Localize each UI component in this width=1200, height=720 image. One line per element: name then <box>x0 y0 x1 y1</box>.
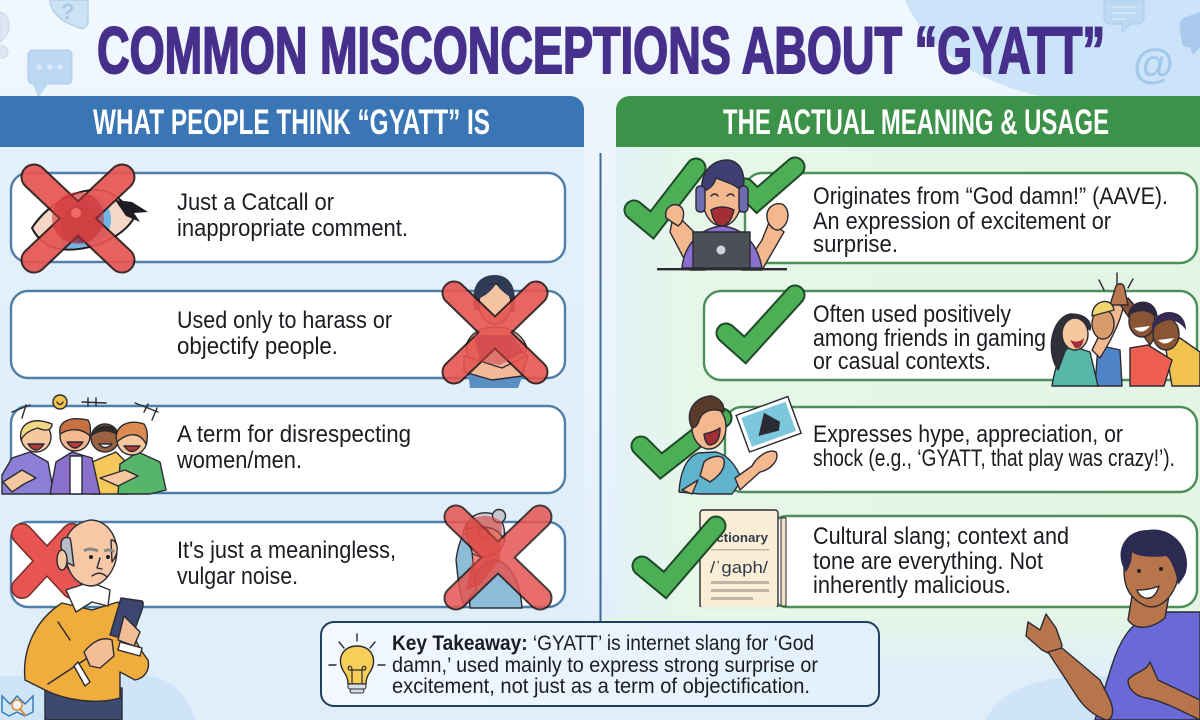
text: cultural slang: inherently malicious. <box>813 572 1011 599</box>
text: cultural slang <box>813 523 1069 599</box>
card: catcall <box>11 173 565 262</box>
panel heading: left: WHAT PEOPLE THINK “GYATT” IS <box>93 103 490 142</box>
text: disrespecting: women/men. <box>176 447 302 474</box>
panel heading bar: right <box>616 96 1200 147</box>
decorative social icons <box>0 0 1200 98</box>
text: origin <box>813 183 1168 258</box>
card: meaningless noise <box>11 522 565 607</box>
text: positive use <box>813 301 1046 375</box>
callout: key takeaway <box>321 622 879 706</box>
icon: light bulb <box>329 634 385 693</box>
text: harass <box>177 307 392 360</box>
illustration: dictionary page <box>698 510 786 610</box>
logo <box>2 696 33 716</box>
card: hype <box>725 407 1197 492</box>
icon: green check 1a <box>634 168 696 225</box>
illustration: speaking man <box>1026 529 1200 720</box>
text: positive use: Often used positively <box>813 301 1012 328</box>
card: origin <box>745 173 1197 263</box>
text: hype <box>813 421 1175 472</box>
takeaway text: excitement, not just as a term of objectification. <box>392 675 810 698</box>
text: disrespecting: A term for disrespecting <box>177 421 411 448</box>
takeaway text: damn,’ used mainly to express strong surprise or <box>392 654 818 677</box>
text: cultural slang: Cultural slang; context and <box>813 523 1069 550</box>
text: cultural slang: tone are everything. Not <box>813 548 1043 575</box>
illustration: laughing friends <box>2 395 166 494</box>
icon: red x left of old man <box>22 534 72 588</box>
text: origin: surprise. <box>813 231 898 258</box>
illustration: dictionary page: Dictionary <box>703 530 769 545</box>
text: catcall: inappropriate comment. <box>177 215 408 242</box>
icon: green check 2 <box>726 295 795 350</box>
icon: green check 1b <box>745 167 795 200</box>
text: positive use: or casual contexts. <box>813 348 991 375</box>
text: meaningless noise: vulgar noise. <box>177 563 298 590</box>
decorative social icons: @ <box>1133 40 1174 87</box>
takeaway text: Key Takeaway: ‘GYATT’ is internet slang for ‘God <box>392 632 814 655</box>
illustration: friends high five <box>1051 273 1200 386</box>
icon: crossed eye <box>32 177 148 260</box>
text: hype: Expresses hype, appreciation, or <box>813 421 1123 448</box>
text: positive use: among friends in gaming <box>813 325 1046 352</box>
card: positive use <box>704 291 1197 380</box>
text: harass: objectify people. <box>177 333 338 360</box>
text: disrespecting <box>176 421 411 474</box>
icon: crossed old woman <box>456 510 540 608</box>
card: harass <box>11 291 565 378</box>
text: catcall <box>177 189 408 242</box>
panel heading bar: left <box>0 96 584 147</box>
panel: what people think <box>0 96 584 617</box>
illustration: hyped person with game card <box>679 396 801 494</box>
illustration: dictionary page: /ˈgaph/ <box>710 558 768 577</box>
icon: green check 4 <box>642 526 716 585</box>
text: origin: An expression of excitement or <box>813 208 1111 235</box>
illustration: excited gamer with laptop <box>657 160 788 270</box>
text: meaningless noise <box>177 537 396 590</box>
panel: actual meaning <box>616 96 1200 617</box>
illustration: confused old man with phone <box>25 520 148 720</box>
icon: crossed woman with folded arms <box>454 275 536 388</box>
card: cultural slang <box>770 516 1197 607</box>
text: harass: Used only to harass or <box>177 307 392 334</box>
text: catcall: Just a Catcall or <box>177 189 334 216</box>
takeaway text <box>392 632 818 698</box>
text: meaningless noise: It's just a meaningless, <box>177 537 396 564</box>
icon: green check 3 <box>641 418 722 466</box>
card: disrespecting <box>11 406 565 493</box>
